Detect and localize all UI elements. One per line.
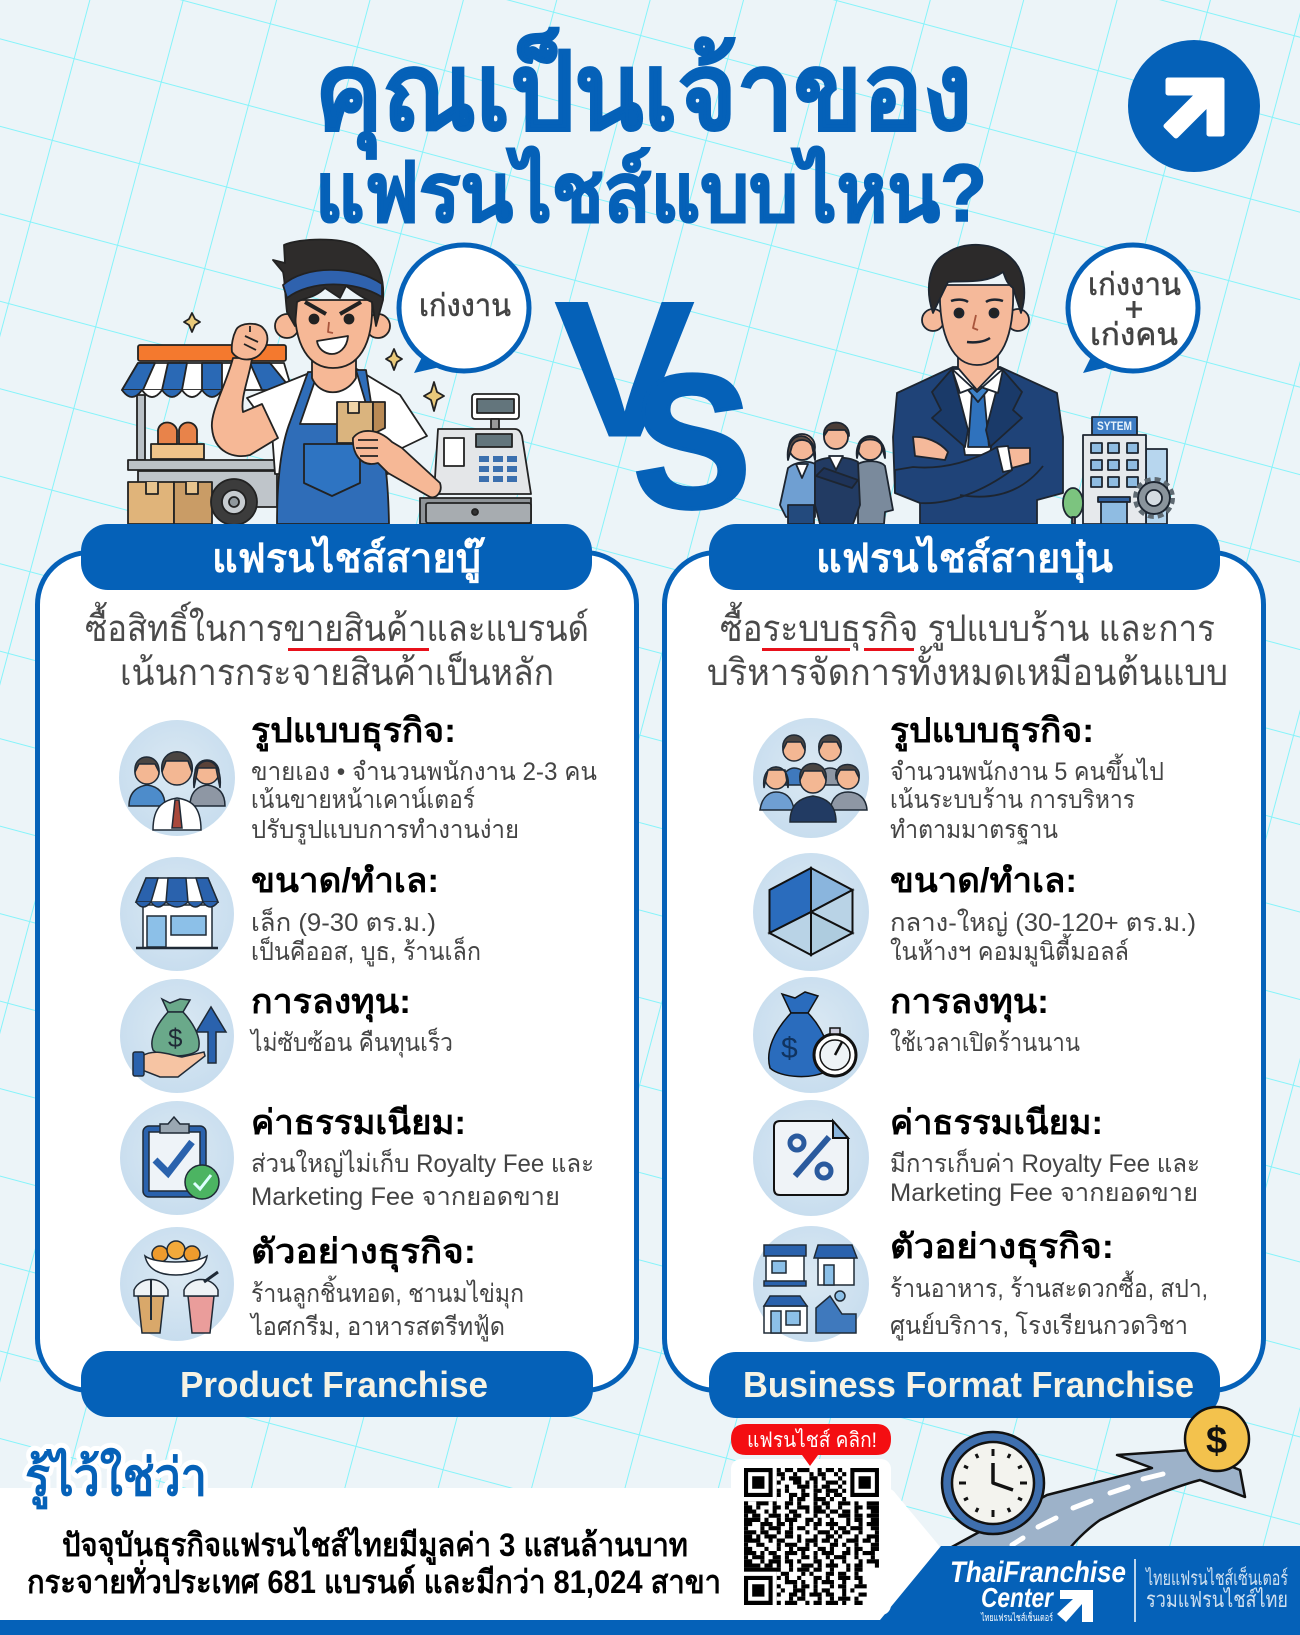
title <box>315 27 987 239</box>
icon: small team <box>119 720 235 836</box>
icon: snacks and bubble tea <box>120 1227 234 1341</box>
title: แฟรนไชส์แบบไหน? <box>315 146 987 239</box>
text: investment: การลงทุน: <box>890 983 1049 1023</box>
panel: product franchise <box>38 524 636 1417</box>
heading: did you know: รู้ไว้ใช่ว่า <box>25 1447 207 1510</box>
callout: franchise click: แฟรนไชส์ คลิก! <box>747 1428 877 1452</box>
callout: franchise click <box>731 1424 891 1466</box>
icon: four storefronts <box>753 1226 869 1342</box>
icon: clipboard with check <box>120 1101 234 1215</box>
text: size and location: ขนาด/ทำเล: <box>890 862 1077 900</box>
text: size and location: กลาง-ใหญ่ (30-120+ ตร.ม.) <box>890 908 1196 937</box>
text: business model: จำนวนพนักงาน 5 คนขึ้นไป <box>890 753 1164 786</box>
description: ซื้อสิทธิ์ในการขายสินค้าและแบรนด์ <box>85 601 589 649</box>
description <box>85 601 589 693</box>
icon: money bag and growth arrow <box>120 979 234 1093</box>
text: market facts: ปัจจุบันธุรกิจแฟรนไชส์ไทยมีมูลค่า 3 แสนล้านบาท <box>62 1526 688 1566</box>
logo: ThaiFranchise Center <box>950 1556 1288 1624</box>
text: business examples <box>249 1233 524 1342</box>
text: investment: ใช้เวลาเปิดร้านนาน <box>890 1028 1080 1057</box>
panel: business format franchise <box>664 524 1264 1418</box>
icon: percent document <box>753 1100 869 1216</box>
speech bubble: skilled at work and people: เก่งคน <box>1090 317 1178 352</box>
panel header: product franchise <box>81 524 592 590</box>
description: เน้นการกระจายสินค้าเป็นหลัก <box>120 649 554 693</box>
text: fees <box>890 1104 1200 1207</box>
panel footer: product franchise <box>81 1351 593 1417</box>
icon: money bag and growth arrow: $ <box>168 1023 183 1053</box>
icon: money bag and stopwatch: $ <box>781 1032 798 1065</box>
illustration: road, clock and coin: $ <box>1206 1420 1227 1462</box>
text: business examples: ไอศกรีม, อาหารสตรีทฟู้ด <box>249 1312 505 1342</box>
illustration: business owner with team and building: SYTEM <box>1097 419 1132 433</box>
panel header: business format franchise <box>709 524 1220 590</box>
icon: floor plan hexagon <box>753 853 869 971</box>
text: business model: ปรับรูปแบบการทำงานง่าย <box>251 816 519 845</box>
QR code card <box>731 1459 891 1615</box>
text: investment: การลงทุน: <box>251 983 411 1023</box>
speech bubble: skilled at work <box>399 245 529 373</box>
text: business model <box>890 712 1164 844</box>
text: business model: เน้นระบบร้าน การบริหาร <box>890 786 1135 814</box>
panel header: business format franchise: แฟรนไชส์สายบุ๋น <box>816 535 1113 584</box>
text: business examples: ตัวอย่างธุรกิจ: <box>890 1228 1114 1268</box>
icon: arrow badge <box>1128 40 1260 172</box>
text: size and location: เป็นคีออส, บูธ, ร้านเล็ก <box>251 936 481 967</box>
text: business model: ทำตามมาตรฐาน <box>890 816 1058 844</box>
panel header: product franchise: แฟรนไชส์สายบู๊ <box>212 535 486 583</box>
text: fees: มีการเก็บค่า Royalty Fee และ <box>890 1148 1200 1178</box>
illustration: business owner with team and building <box>780 245 1173 524</box>
speech bubble: skilled at work and people: เก่งงาน <box>1088 267 1181 302</box>
text: fees: ค่าธรรมเนียม: <box>890 1104 1103 1142</box>
text: size and location <box>890 862 1196 967</box>
text: business examples: ศูนย์บริการ, โรงเรียนกวดวิชา <box>890 1311 1188 1341</box>
speech bubble: skilled at work and people <box>1068 245 1198 373</box>
panel footer: product franchise: Product Franchise <box>180 1364 488 1405</box>
text: business model: รูปแบบธุรกิจ: <box>890 712 1094 752</box>
footer: did you know band <box>0 1447 1300 1635</box>
text: fees: ค่าธรรมเนียม: <box>251 1104 466 1142</box>
title: คุณเป็นเจ้าของ <box>315 27 972 160</box>
icon: small shop <box>120 857 234 971</box>
text: market facts: กระจายทั่วประเทศ 681 แบรนด์ และมีกว่า 81,024 สาขา <box>27 1559 721 1600</box>
text: investment: ไม่ซับซ้อน คืนทุนเร็ว <box>249 1027 453 1058</box>
text: business model <box>251 712 597 845</box>
description <box>707 601 1228 693</box>
text: investment <box>890 983 1080 1057</box>
VS mark: V <box>554 261 695 478</box>
icon: money bag and stopwatch <box>753 977 869 1093</box>
text: size and location: ขนาด/ทำเล: <box>251 862 439 900</box>
VS mark <box>554 261 751 548</box>
logo: ThaiFranchise Center: Center <box>981 1582 1055 1613</box>
text: market facts <box>27 1526 721 1600</box>
text: business model: ขายเอง • จำนวนพนักงาน 2-3 คน <box>251 758 597 786</box>
text: business examples: ร้านลูกชิ้นทอด, ชานมไข่มุก <box>251 1275 524 1309</box>
QR pattern <box>744 1468 879 1605</box>
text: fees <box>251 1104 594 1211</box>
illustration: vendor with cart and cash register <box>122 240 531 525</box>
description: บริหารจัดการทั้งหมดเหมือนต้นแบบ <box>707 645 1228 693</box>
icon: large team <box>753 718 869 838</box>
panel footer: business format franchise <box>709 1352 1220 1418</box>
text: fees: Marketing Fee จากยอดขาย <box>251 1183 560 1211</box>
text: fees: ส่วนใหญ่ไม่เก็บ Royalty Fee และ <box>251 1148 594 1178</box>
VS mark: S <box>633 336 751 548</box>
text: fees: Marketing Fee จากยอดขาย <box>890 1179 1198 1207</box>
text: size and location: เล็ก (9-30 ตร.ม.) <box>251 907 436 937</box>
text: business model: เน้นขายหน้าเคาน์เตอร์ <box>251 786 475 814</box>
text: business model: รูปแบบธุรกิจ: <box>251 712 456 752</box>
text: business examples <box>890 1228 1208 1341</box>
speech bubble: skilled at work: เก่งงาน <box>419 288 511 323</box>
text: investment <box>249 983 453 1058</box>
text: size and location <box>251 862 481 967</box>
illustration: road, clock and coin <box>942 1407 1249 1548</box>
text: business examples: ร้านอาหาร, ร้านสะดวกซื้อ, สปา, <box>890 1270 1208 1303</box>
text: size and location: ในห้างฯ คอมมูนิตี้มอลล์ <box>890 933 1129 967</box>
logo: ThaiFranchise Center: ThaiFranchise <box>950 1556 1126 1589</box>
logo: ThaiFranchise Center: ไทยแฟรนไชส์เซ็นเตอร์ <box>980 1610 1053 1624</box>
description: ซื้อระบบธุรกิจ รูปแบบร้าน และการ <box>720 601 1215 651</box>
panel footer: business format franchise: Business Format Franchise <box>743 1364 1194 1405</box>
text: business examples: ตัวอย่างธุรกิจ: <box>251 1233 476 1273</box>
